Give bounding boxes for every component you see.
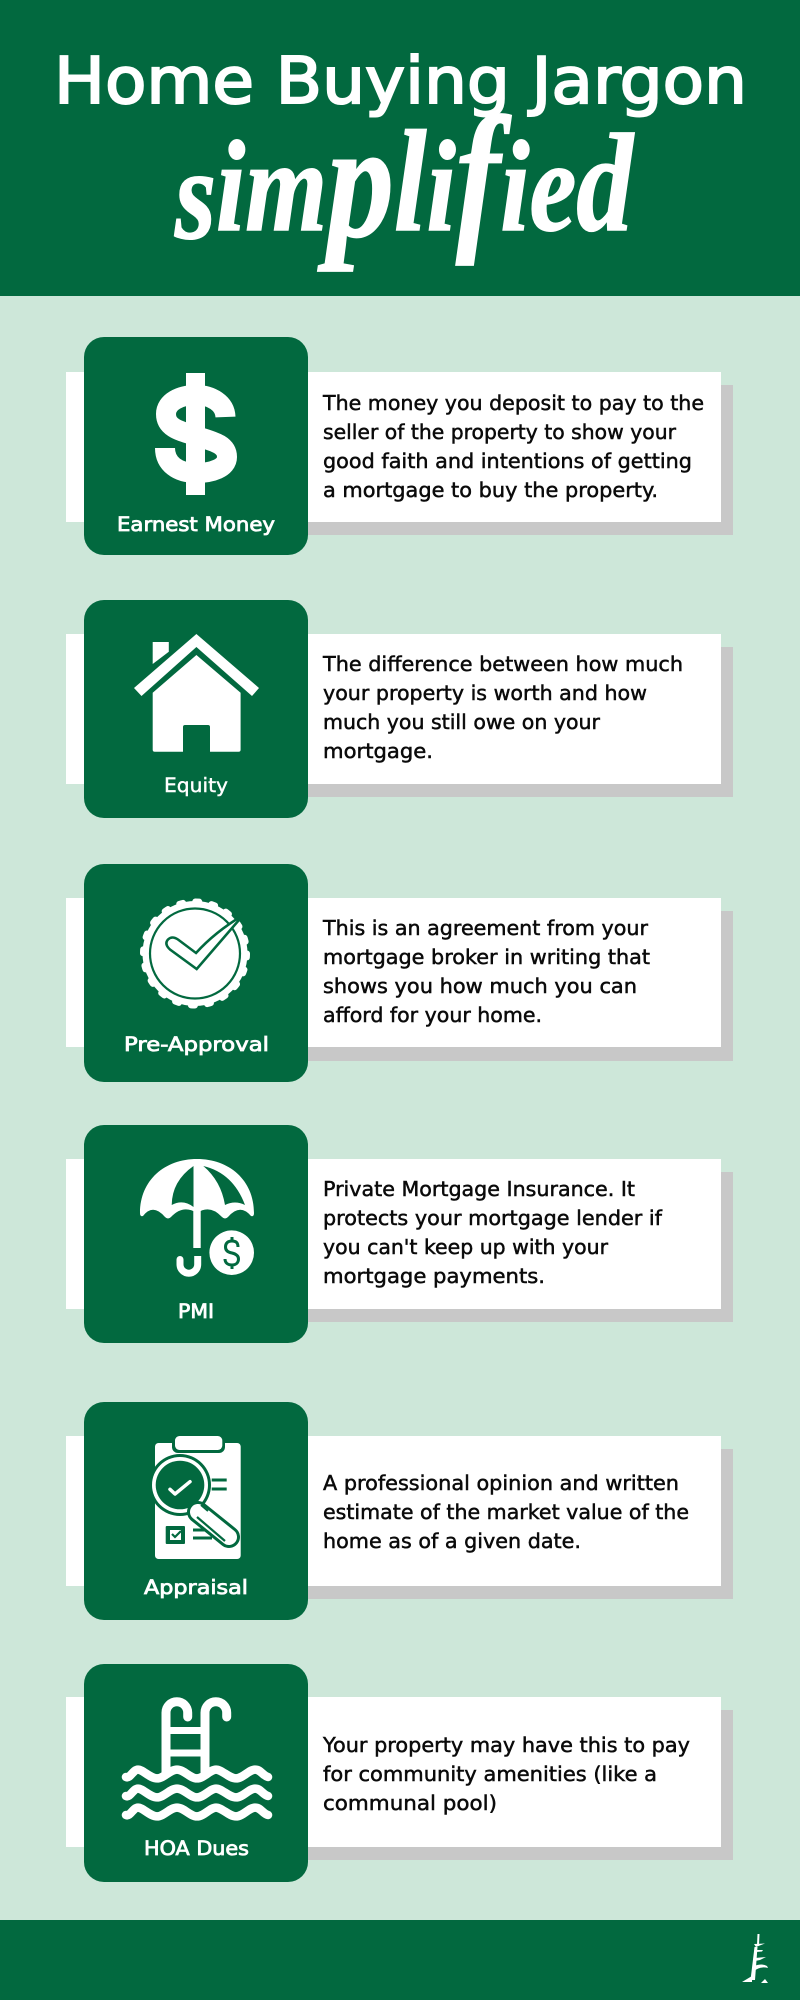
description: pre-approval: shows you how much you can <box>323 974 637 998</box>
description: pmi: Private Mortgage Insurance. It <box>323 1177 635 1201</box>
description: appraisal: home as of a given date. <box>323 1529 581 1553</box>
description: earnest money: a mortgage to buy the property. <box>323 478 658 502</box>
icon: umbrella with coin <box>140 1159 254 1275</box>
description: appraisal: estimate of the market value of the <box>323 1500 689 1524</box>
description: pre-approval: mortgage broker in writing that <box>323 945 650 969</box>
panel: pmi <box>66 1125 733 1343</box>
icon: house <box>134 634 259 752</box>
description: equity: mortgage. <box>323 739 433 763</box>
panel: earnest money <box>66 337 733 555</box>
description: pre-approval: This is an agreement from your <box>322 916 649 940</box>
subtitle script word: p <box>317 89 394 272</box>
subtitle script word: ified <box>427 83 646 266</box>
description: hoa dues: for community amenities (like a <box>323 1762 657 1786</box>
description: equity: The difference between how much <box>322 652 683 676</box>
panel: pre-approval <box>66 864 733 1082</box>
description: pmi: you can't keep up with your <box>323 1235 609 1259</box>
subtitle script word: l <box>394 102 427 262</box>
icon: lighthouse logo <box>742 1934 768 1983</box>
footer band <box>0 1920 800 2000</box>
header band <box>0 0 800 296</box>
label: pre-approval: Pre-Approval <box>124 1033 269 1056</box>
description: pre-approval <box>322 916 650 1027</box>
description: hoa dues: Your property may have this to pay <box>322 1733 690 1757</box>
subtitle script word: s <box>174 123 216 267</box>
description: equity: your property is worth and how <box>323 681 647 705</box>
description: appraisal: A professional opinion and written <box>323 1471 679 1495</box>
description: equity: much you still owe on your <box>323 710 601 734</box>
description: pre-approval: afford for your home. <box>323 1003 542 1027</box>
title: Home Buying Jargon <box>54 45 747 119</box>
panel: appraisal <box>66 1402 733 1620</box>
description: pmi: protects your mortgage lender if <box>323 1206 663 1230</box>
panel: equity <box>66 600 733 818</box>
icon: dollar sign <box>165 373 227 495</box>
label: pmi: PMI <box>178 1300 214 1323</box>
icon: clipboard with magnifier <box>149 1433 241 1559</box>
description: pmi <box>323 1177 663 1288</box>
icon: approval badge with check <box>142 901 248 1006</box>
description: earnest money: good faith and intentions of getting <box>323 449 692 473</box>
label: hoa dues: HOA Dues <box>144 1837 249 1860</box>
label: equity: Equity <box>164 774 228 797</box>
description: earnest money: The money you deposit to pay to the <box>322 391 704 415</box>
label: appraisal: Appraisal <box>144 1576 248 1599</box>
icon: pool ladder and water <box>126 1702 268 1816</box>
label: earnest money: Earnest Money <box>117 513 275 536</box>
description: earnest money <box>322 391 704 502</box>
description: appraisal <box>323 1471 689 1553</box>
description: equity <box>322 652 683 763</box>
description: pmi: mortgage payments. <box>323 1264 545 1288</box>
description: hoa dues: communal pool) <box>323 1791 497 1815</box>
description: earnest money: seller of the property to show your <box>323 420 677 444</box>
description: hoa dues <box>322 1733 690 1815</box>
subtitle script word: im <box>216 115 327 259</box>
panel: hoa dues <box>66 1664 733 1882</box>
